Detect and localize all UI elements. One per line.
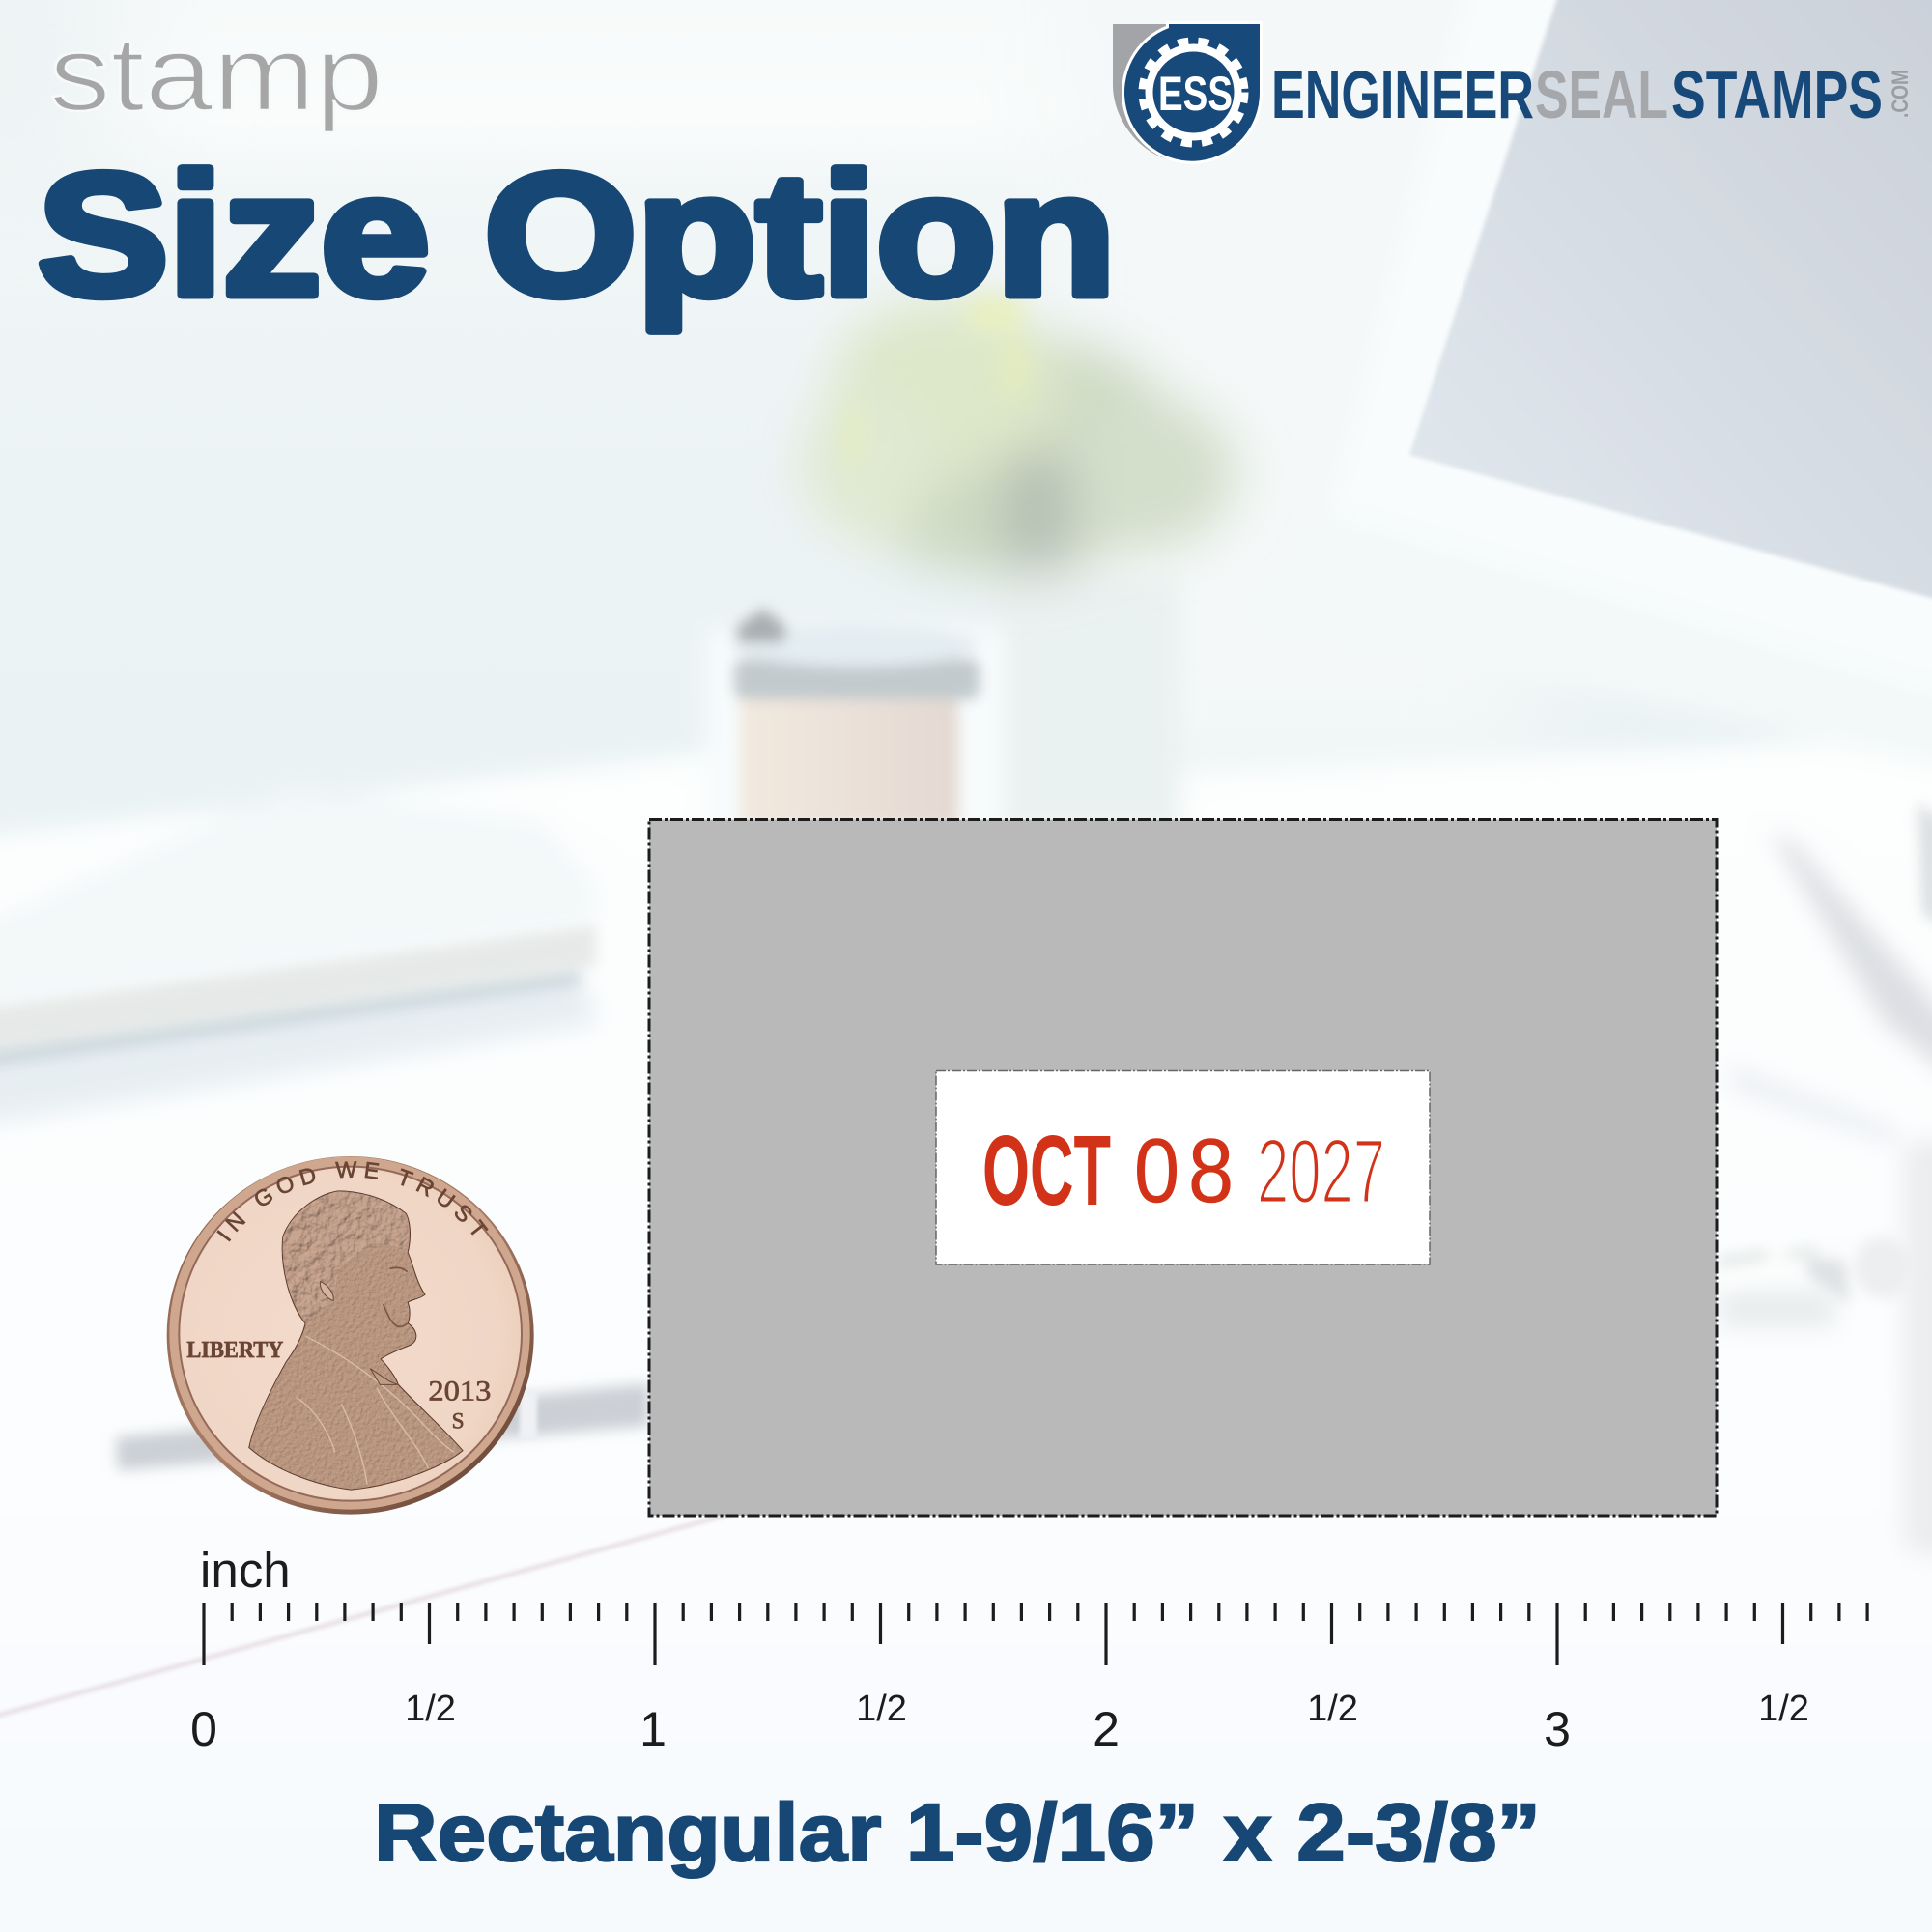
ruler inch numbers [190,1702,1571,1756]
logo wordmark: .COM [1888,70,1914,118]
ruler half labels: 1/2 [1307,1689,1358,1729]
ruler 1/16 inch ticks [232,1603,1867,1621]
logo wordmark [1271,57,1914,132]
inch ruler [190,1543,1867,1756]
ruler inch numbers: 3 [1544,1702,1571,1756]
logo badge with gear: ESS [1158,67,1233,121]
ruler inch numbers: 0 [190,1702,217,1756]
logo: Engineer Seal Stamps [1113,24,1914,161]
logo wordmark: SEAL [1535,57,1668,132]
Lincoln portrait [249,1191,462,1490]
date imprint text [982,1115,1385,1226]
ruler inch numbers: 2 [1093,1702,1120,1756]
ruler half labels: 1/2 [856,1689,907,1729]
small heading: stamp: stamp [49,14,384,133]
date imprint text: 08 [1134,1120,1242,1221]
ruler half labels: 1/2 [1758,1689,1809,1729]
coin inscriptions [186,1161,491,1434]
logo badge with gear [1113,24,1260,161]
ruler inch numbers: 1 [639,1702,667,1756]
coin inscriptions: 2013 [428,1375,491,1406]
ruler inch ticks [204,1603,1557,1665]
coin inscriptions: S [452,1408,465,1434]
date imprint text: 2027 [1257,1121,1385,1223]
main heading: Size Option: Size Option [38,138,1116,332]
date imprint text: OCT [982,1115,1111,1226]
coin body [167,1156,534,1515]
penny for scale comparison [166,1156,534,1515]
ruler half inch ticks [429,1603,1783,1644]
stamp outline: grey case footprint [649,819,1717,1516]
logo wordmark: ENGINEER [1271,57,1534,132]
ruler half labels: 1/2 [405,1689,456,1729]
imprint area [936,1070,1430,1264]
ruler unit label: inch [200,1543,291,1598]
coin inscriptions: IN GOD WE TRUST [216,1161,489,1242]
size caption: Rectangular 1-9/16” x 2-3/8” [374,1787,1541,1878]
coin inscriptions: LIBERTY [186,1338,283,1363]
ruler half labels [405,1689,1809,1729]
